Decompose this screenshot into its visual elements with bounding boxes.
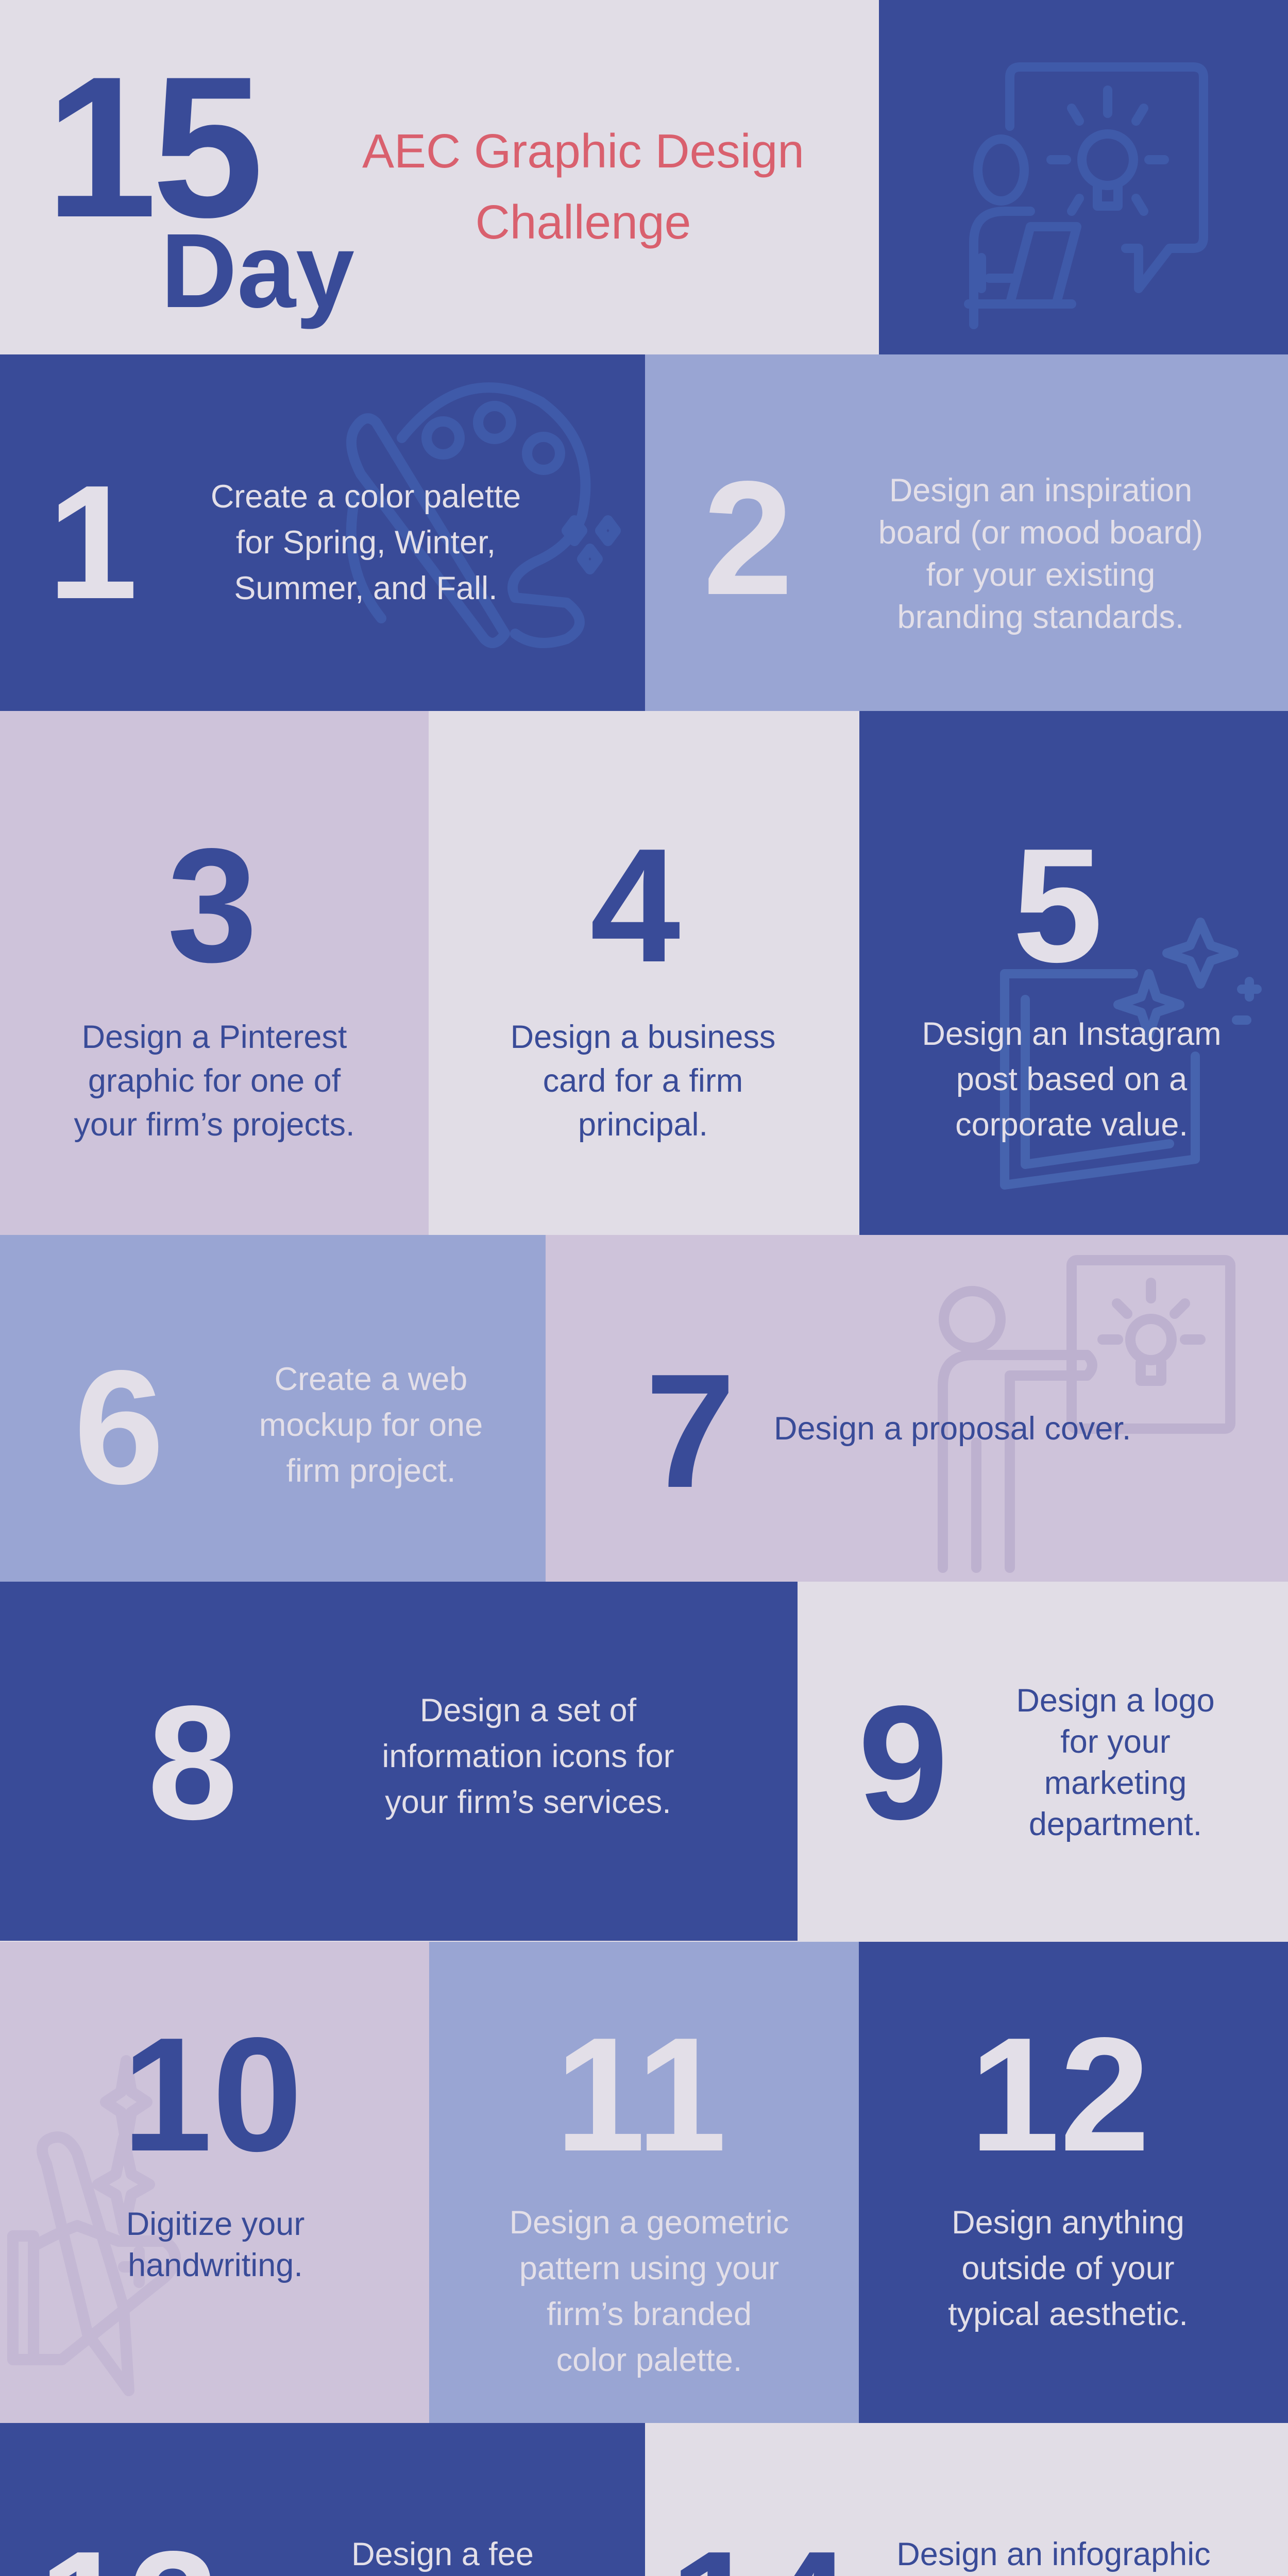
text 5 [922, 1016, 1222, 1143]
text 4: card for a firm [543, 1063, 743, 1099]
text 5: post based on a [956, 1061, 1187, 1097]
text 10: Digitize your [126, 2206, 304, 2242]
text 6: mockup for one [259, 1407, 483, 1443]
title [362, 124, 804, 249]
text 4: Design a business [511, 1019, 775, 1055]
title: Challenge [476, 195, 691, 249]
text 10: handwriting. [128, 2247, 303, 2283]
number 4: 4 [590, 815, 681, 996]
text 7: Design a proposal cover. [774, 1411, 1131, 1447]
item 12 [859, 1942, 1288, 2423]
panel 7 [546, 1235, 1288, 1582]
item 6 [74, 1336, 483, 1518]
text 9: department. [1029, 1806, 1202, 1842]
text 5: Design an Instagram [922, 1016, 1222, 1052]
item 8 [147, 1672, 674, 1853]
text 8 [382, 1692, 674, 1820]
number 11: 11 [555, 2004, 726, 2185]
text 11 [443, 2200, 855, 2383]
icon: palette [351, 387, 616, 643]
text 8: your firm’s services. [385, 1784, 671, 1820]
text 1: Create a color palette [211, 479, 521, 515]
header right panel [879, 0, 1288, 354]
panel 2 [645, 354, 1288, 711]
item 13 [0, 2423, 645, 2576]
header word Day: Day [161, 212, 354, 330]
title: AEC Graphic Design [362, 124, 804, 178]
panel 9 [798, 1582, 1288, 1941]
text 2 [878, 472, 1203, 635]
item 7 [645, 1340, 1131, 1521]
item 2 [703, 447, 1203, 635]
number 5: 5 [1012, 815, 1103, 996]
item 5 [922, 815, 1222, 1143]
number 6: 6 [74, 1336, 164, 1518]
text 13: Design a fee [351, 2536, 534, 2572]
panel 11 [429, 1942, 859, 2423]
text 10 [35, 2204, 396, 2286]
number 3: 3 [167, 815, 258, 996]
text 6 [259, 1361, 483, 1489]
number 1: 1 [47, 451, 138, 633]
item 4 [511, 815, 775, 1143]
text 1: for Spring, Winter, [236, 524, 496, 561]
panel 14 [645, 2423, 1288, 2576]
item 11 [429, 1942, 859, 2423]
text 3: your firm’s projects. [74, 1107, 354, 1143]
panel 3 [0, 711, 429, 1235]
text 6: Create a web [275, 1361, 467, 1397]
number 9: 9 [858, 1672, 948, 1853]
text 11: Design a geometric [510, 2205, 789, 2241]
header left panel [0, 0, 879, 354]
icon: presenter with board [943, 1260, 1230, 1568]
text 14: Design an infographic [896, 2536, 1211, 2572]
text 2: Design an inspiration [889, 472, 1192, 509]
text 5: corporate value. [955, 1107, 1188, 1143]
number 10: 10 [122, 2004, 302, 2185]
text 11: color palette. [556, 2342, 742, 2378]
text 3 [74, 1019, 354, 1143]
icon: idea person [969, 67, 1204, 325]
panel 8 [0, 1582, 798, 1941]
text 12 [862, 2200, 1274, 2337]
panel 6 [0, 1235, 546, 1582]
text 6: firm project. [286, 1453, 456, 1489]
text 12: typical aesthetic. [948, 2296, 1188, 2332]
text 8: information icons for [382, 1738, 674, 1774]
panel 5 [859, 711, 1288, 1235]
text 2: board (or mood board) [878, 515, 1203, 551]
item 3 [74, 815, 354, 1143]
text 8: Design a set of [420, 1692, 636, 1728]
panel 10 [0, 1942, 429, 2423]
item 14 [645, 2423, 1288, 2576]
icon: hand with pen [13, 2061, 175, 2391]
text 9: marketing [1044, 1765, 1187, 1801]
text 11: firm’s branded [547, 2296, 752, 2332]
number 8: 8 [147, 1672, 238, 1853]
panel 12 [859, 1942, 1288, 2423]
text 2: branding standards. [897, 599, 1184, 635]
text 12: outside of your [961, 2250, 1175, 2286]
icon: frame with sparkles [1005, 922, 1257, 1185]
text 1: Summer, and Fall. [234, 570, 498, 606]
text 2: for your existing [926, 557, 1155, 593]
text 9: for your [1060, 1724, 1171, 1760]
number 7: 7 [645, 1340, 736, 1521]
header number 15: 15 [45, 35, 259, 259]
text 9: Design a logo [1016, 1683, 1215, 1719]
item 1 [47, 451, 521, 633]
text 11: pattern using your [519, 2250, 779, 2286]
panel 13 [0, 2423, 645, 2576]
text 4 [511, 1019, 775, 1143]
text 12: Design anything [952, 2205, 1184, 2241]
text 3: graphic for one of [88, 1063, 341, 1099]
text 9 [1016, 1683, 1215, 1842]
text 4: principal. [578, 1107, 708, 1143]
item 10 [122, 2004, 304, 2283]
item 9 [858, 1672, 1215, 1853]
panel 4 [429, 711, 859, 1235]
text 1 [211, 479, 521, 606]
text 3: Design a Pinterest [82, 1019, 347, 1055]
panel 1 [0, 354, 645, 711]
number 2: 2 [703, 447, 793, 629]
number 12: 12 [970, 2004, 1150, 2185]
